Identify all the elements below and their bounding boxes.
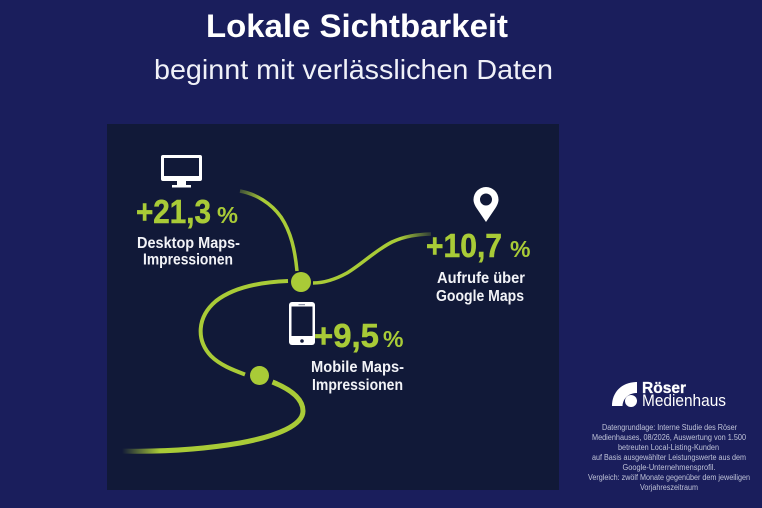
logo: Röser Medienhaus: Medienhaus xyxy=(642,392,726,410)
node: upper xyxy=(291,272,311,292)
percent sign: % xyxy=(510,236,530,262)
percent sign: % xyxy=(383,326,404,352)
stat: google maps views xyxy=(426,187,530,305)
data source footnote: Medienhauses, 08/2026, Auswertung von 1.500 xyxy=(592,433,746,442)
logo: Röser Medienhaus xyxy=(612,380,726,410)
label xyxy=(137,235,240,268)
data source footnote: Vorjahreszeitraum xyxy=(640,483,698,492)
percent sign: % xyxy=(217,202,238,228)
label: Impressionen xyxy=(312,377,403,394)
data source footnote: auf Basis ausgewählter Leistungswerte aus dem xyxy=(592,453,746,462)
label xyxy=(311,359,404,394)
data source footnote: Datengrundlage: Interne Studie des Röser xyxy=(602,423,737,432)
panel: map infographic xyxy=(107,124,559,490)
panel background xyxy=(107,124,559,490)
logo wordmark: Röser xyxy=(642,380,686,397)
node: lower xyxy=(250,366,269,385)
value: +9,5 xyxy=(314,317,379,354)
icon: smartphone xyxy=(289,302,315,345)
label: Aufrufe über xyxy=(437,270,525,287)
data source footnote: Google-Unternehmensprofil. xyxy=(622,463,716,472)
data source footnote: betreuten Local-Listing-Kunden xyxy=(618,443,719,452)
label xyxy=(436,270,525,305)
stat: desktop maps impressions xyxy=(136,155,240,268)
logo mark xyxy=(612,382,637,407)
subheading: beginnt mit verlässlichen Daten xyxy=(154,54,553,85)
stat: mobile maps impressions xyxy=(289,302,404,394)
label: Google Maps xyxy=(436,288,524,305)
value: +21,3 xyxy=(136,193,211,230)
label: Desktop Maps- xyxy=(137,235,240,252)
icon: desktop monitor xyxy=(161,155,202,188)
route: desktop branch xyxy=(240,191,297,271)
route: lower tail xyxy=(122,382,303,451)
route: middle loop xyxy=(201,281,288,374)
route: google maps branch xyxy=(313,234,431,283)
label: Impressionen xyxy=(143,252,233,268)
icon: map pin xyxy=(474,187,498,222)
data source footnote xyxy=(588,423,750,492)
route lines xyxy=(122,191,431,451)
label: Mobile Maps- xyxy=(311,359,404,376)
value: +10,7 xyxy=(426,227,502,264)
title xyxy=(154,8,553,85)
heading: Lokale Sichtbarkeit xyxy=(206,8,508,44)
